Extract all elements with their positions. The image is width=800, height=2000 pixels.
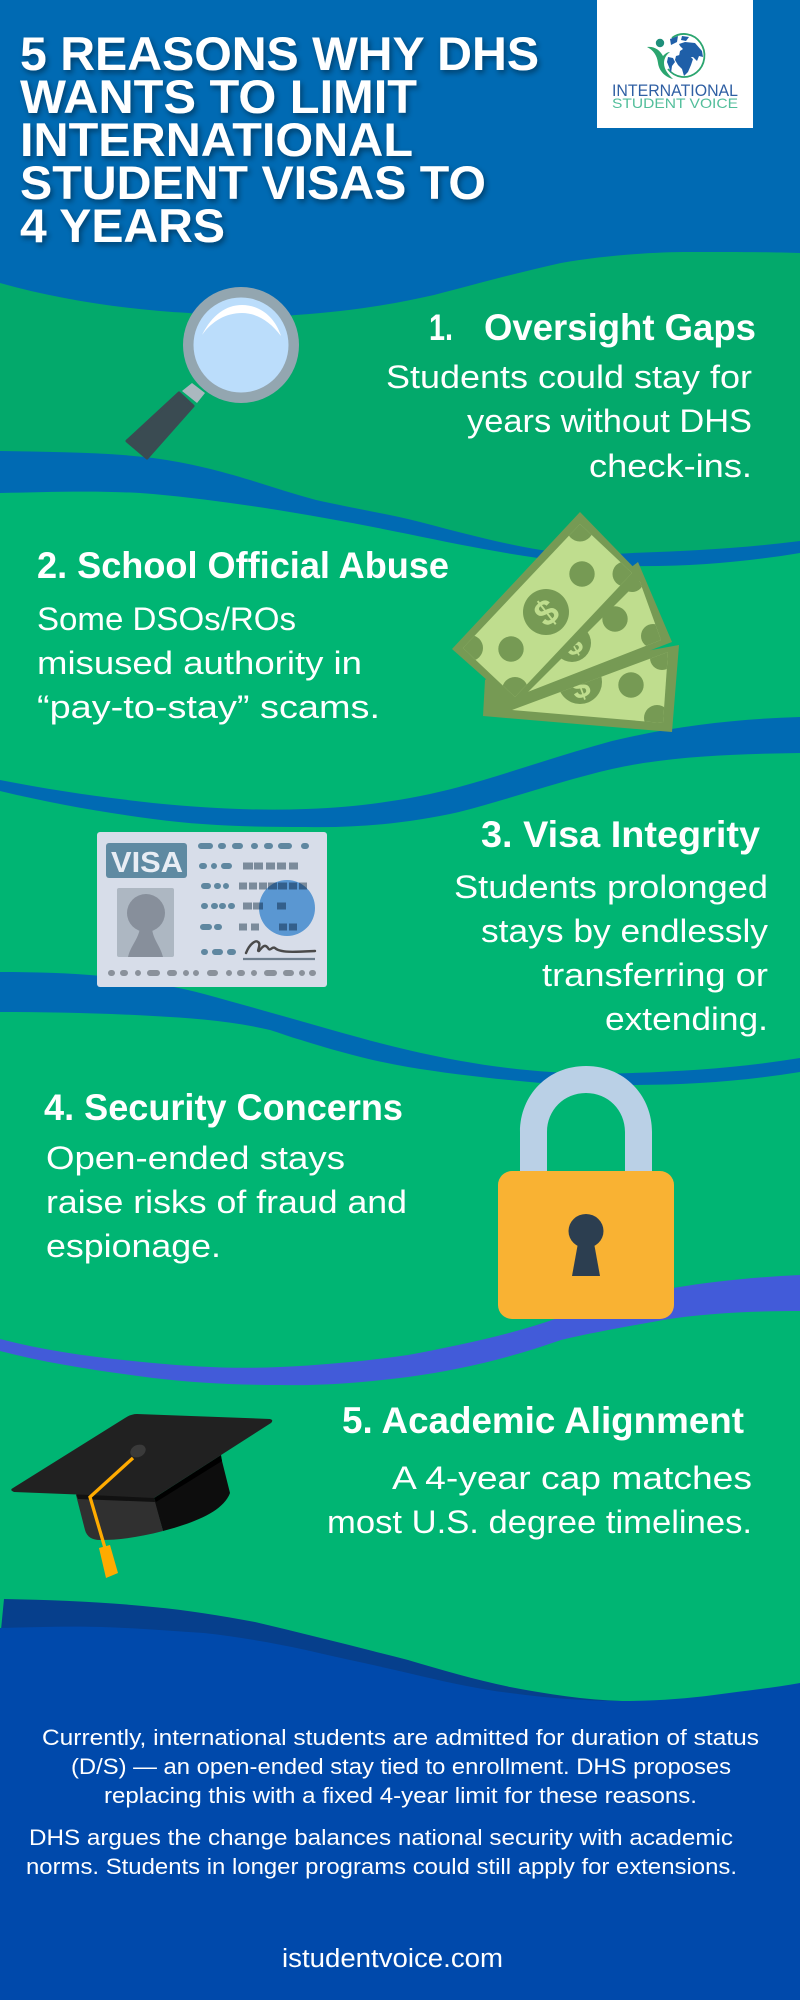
reason 2: School Official Abuse: 2. School Official Abuse (37, 545, 449, 586)
icon: stack of banknotes (452, 512, 679, 732)
icon: stack of banknotes: $ (558, 627, 589, 664)
reason 3: Visa Integrity: stays by endlessly (481, 913, 769, 949)
icon: magnifying glass (127, 287, 299, 458)
reason 2: School Official Abuse: “pay-to-stay” scams. (37, 689, 380, 725)
icon: graduation cap (11, 1414, 272, 1578)
reason 1: Oversight Gaps: Oversight Gaps (484, 307, 756, 348)
reason 2: School Official Abuse (37, 545, 449, 725)
reason 4: Security Concerns: Open-ended stays (46, 1140, 345, 1176)
intro paragraph: (D/S) — an open-ended stay tied to enrollment. DHS proposes (71, 1754, 731, 1779)
title: WANTS TO LIMIT (20, 70, 417, 123)
icon: stack of banknotes: $ (566, 667, 595, 707)
logo: International Student Voice: INTERNATIONAL (612, 82, 738, 100)
reason 4: Security Concerns: raise risks of fraud and (46, 1184, 407, 1220)
reason 4: Security Concerns: espionage. (46, 1228, 221, 1264)
reason 2: School Official Abuse: Some DSOs/ROs (37, 601, 296, 637)
reason 3: Visa Integrity: 3. Visa Integrity (481, 814, 760, 855)
reason 4: Security Concerns (44, 1087, 407, 1264)
closing paragraph: norms. Students in longer programs could still apply for extensions. (26, 1854, 737, 1879)
reason 5: Academic Alignment: most U.S. degree timelines. (327, 1504, 752, 1540)
icon: visa card: VISA (111, 847, 183, 879)
intro paragraph (42, 1725, 759, 1808)
reason 1: Oversight Gaps: Students could stay for (386, 359, 752, 395)
website footer: istudentvoice.com (282, 1945, 503, 1973)
title: 4 YEARS (20, 199, 225, 252)
title: INTERNATIONAL (20, 113, 413, 166)
title: STUDENT VISAS TO (20, 156, 486, 209)
reason 3: Visa Integrity: transferring or (542, 957, 768, 993)
reason 2: School Official Abuse: misused authority in (37, 645, 362, 681)
logo: International Student Voice (597, 0, 753, 128)
reason 1: Oversight Gaps: 1. (429, 307, 453, 348)
closing paragraph: DHS argues the change balances national security with academic (29, 1825, 733, 1850)
intro paragraph: Currently, international students are admitted for duration of status (42, 1725, 759, 1750)
reason 1: Oversight Gaps: check-ins. (589, 448, 752, 484)
closing paragraph (26, 1825, 737, 1879)
reason 5: Academic Alignment: 5. Academic Alignment (342, 1400, 744, 1441)
reason 1: Oversight Gaps: years without DHS (467, 403, 752, 439)
reason 4: Security Concerns: 4. Security Concerns (44, 1087, 403, 1128)
intro paragraph: replacing this with a fixed 4-year limit for these reasons. (104, 1783, 697, 1808)
title: 5 REASONS WHY DHS (20, 27, 539, 80)
logo: International Student Voice: STUDENT VOICE (612, 95, 738, 111)
reason 1: Oversight Gaps (386, 307, 756, 484)
icon: padlock (498, 1066, 674, 1319)
reason 3: Visa Integrity: extending. (605, 1001, 768, 1037)
reason 3: Visa Integrity: Students prolonged (454, 869, 768, 905)
reason 5: Academic Alignment: A 4-year cap matches (392, 1460, 752, 1496)
reason 3: Visa Integrity (454, 814, 769, 1037)
title (20, 27, 539, 252)
icon: visa card (97, 832, 327, 987)
reason 5: Academic Alignment (327, 1400, 752, 1540)
icon: stack of banknotes: $ (526, 590, 567, 635)
